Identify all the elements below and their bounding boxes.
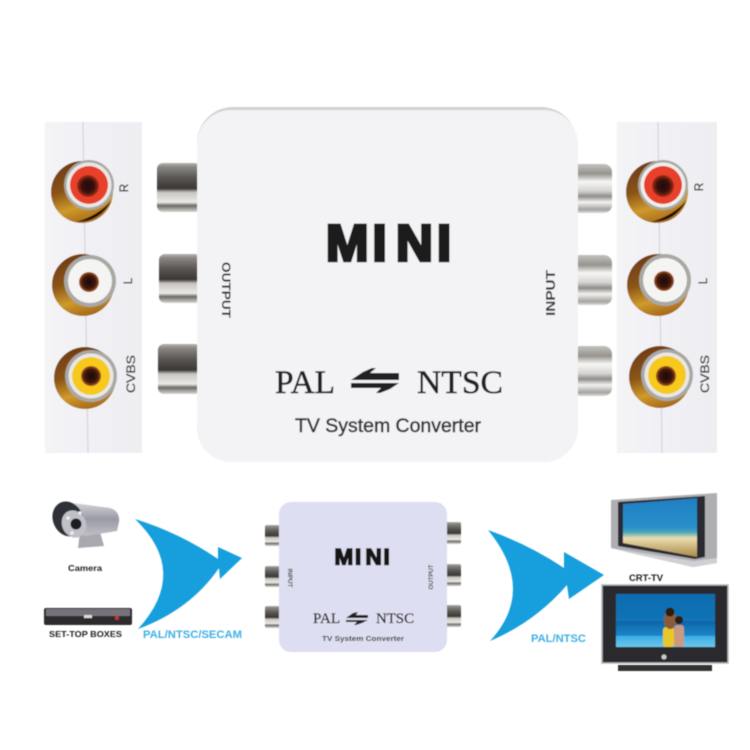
label: INPUT: INPUT — [543, 270, 558, 316]
small brand: MINI: N — [366, 544, 382, 570]
brand: MINI: M — [326, 214, 368, 272]
small brand: MINI: I — [384, 544, 390, 570]
small label: NTSC: NTSC — [376, 611, 414, 627]
small brand: MINI: M — [334, 544, 353, 570]
icon: set-top box — [44, 608, 132, 625]
label: TV System Converter: TV System Converter — [295, 416, 482, 437]
label: PAL: PAL — [275, 365, 335, 401]
small label: INPUT: INPUT — [286, 568, 292, 588]
small connectors — [265, 522, 461, 628]
source: camera — [44, 496, 132, 639]
icon: CRT TV — [611, 493, 717, 567]
small brand: MINI: I — [355, 544, 361, 570]
jack: white L — [52, 254, 116, 316]
small label: PAL: PAL — [313, 611, 340, 627]
small label: TV System Converter: TV System Converter — [322, 634, 404, 643]
label: NTSC: NTSC — [417, 365, 503, 401]
label: L: L — [121, 277, 135, 284]
jack: red R — [626, 160, 688, 223]
jack: white L — [627, 254, 691, 316]
label: L: L — [696, 277, 710, 284]
arrow: output signal — [488, 530, 604, 641]
icon: LCD TV — [602, 585, 728, 671]
jack: red R — [51, 160, 114, 223]
label: PAL/NTSC/SECAM: PAL/NTSC/SECAM — [143, 629, 242, 641]
panel: right jack close-up — [617, 122, 717, 453]
small converter — [265, 502, 461, 652]
main converter connectors — [157, 163, 612, 396]
brand: MINI: N — [396, 214, 433, 272]
label: R: R — [692, 182, 706, 191]
label: CVBS: CVBS — [124, 355, 138, 393]
label: SET-TOP BOXES: SET-TOP BOXES — [49, 629, 122, 639]
brand: MINI: I — [437, 214, 451, 272]
main converter body — [197, 107, 578, 462]
jack: yellow CVBS — [54, 347, 117, 409]
label: Camera: Camera — [68, 563, 102, 573]
label: OUTPUT: OUTPUT — [219, 262, 233, 319]
brand: MINI: I — [372, 214, 387, 272]
icon: double arrows — [351, 368, 399, 393]
label: CVBS: CVBS — [698, 355, 712, 393]
label: R: R — [117, 183, 131, 192]
jack: yellow CVBS — [629, 346, 693, 408]
panel: left jack close-up — [45, 122, 142, 453]
icon: camera — [47, 496, 119, 548]
small icon: arrows — [346, 612, 368, 625]
label: CRT-TV: CRT-TV — [629, 573, 663, 583]
arrow: input signal — [135, 519, 242, 629]
small body — [279, 502, 447, 652]
label: PAL/NTSC: PAL/NTSC — [531, 633, 586, 645]
small label: OUTPUT: OUTPUT — [429, 564, 435, 590]
